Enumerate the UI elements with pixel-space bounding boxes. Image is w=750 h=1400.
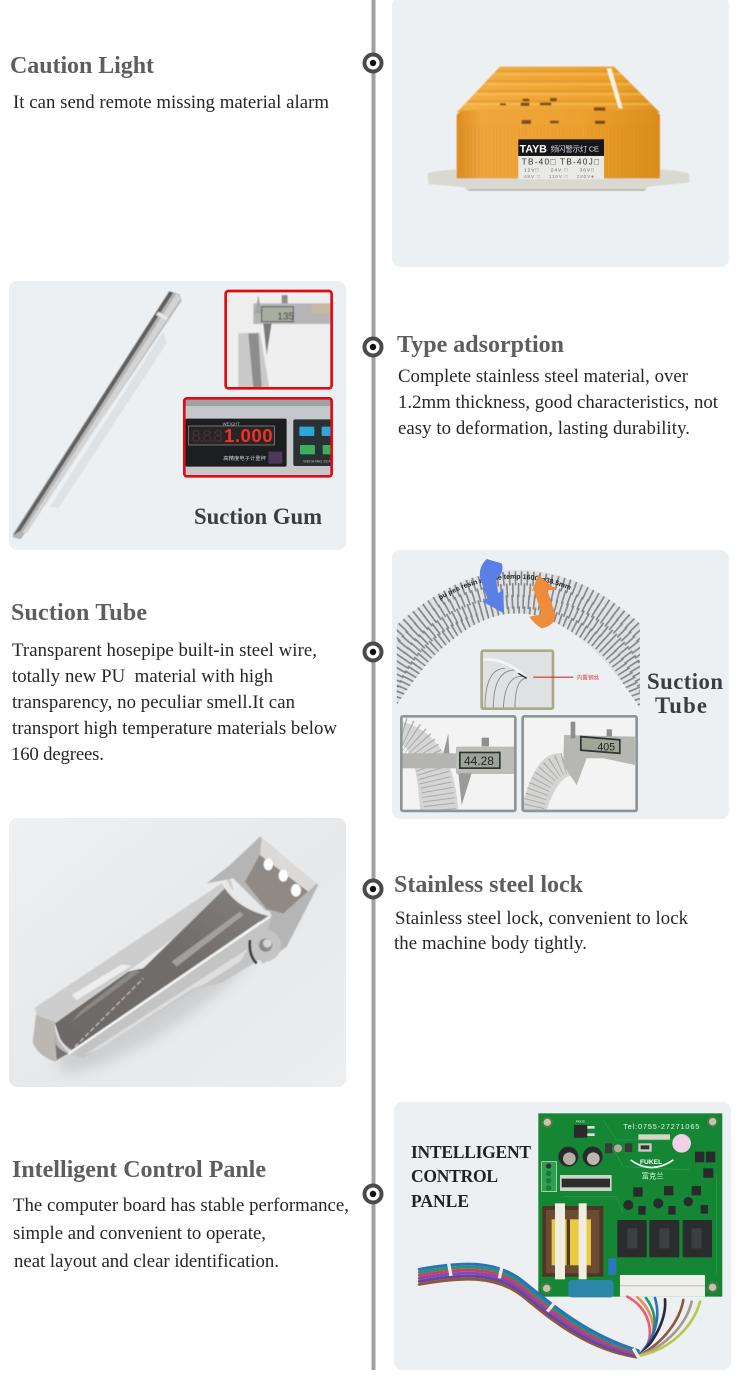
text block: type adsorption (397, 332, 719, 439)
label: model plate: 48V □ 110V □ 220V● (524, 174, 594, 180)
description: type adsorption: easy to deformation, lasting durability. (398, 418, 690, 439)
label: model plate: TAYB (520, 144, 547, 156)
inset: inner diameter caliper (523, 716, 637, 811)
description: type adsorption: 1.2mm thickness, good characteristics, not (398, 392, 719, 413)
description: caution light: It can send remote missing material alarm (13, 92, 329, 113)
board screws (542, 1117, 717, 1293)
timeline marker 3 (364, 644, 382, 660)
panel: suction tube photo (392, 550, 729, 819)
cable ties (448, 1262, 640, 1360)
inset: outer diameter caliper: 44.28 (464, 754, 494, 768)
pink sticker (672, 1134, 691, 1153)
label: model plate: 频闪警示灯 CE (551, 143, 599, 153)
inset: outer diameter caliper (401, 716, 515, 811)
description: suction tube: transport high temperature materials below (12, 718, 337, 739)
heading: caution light: Caution Light (10, 53, 154, 79)
heading: suction tube: Suction Tube (11, 600, 147, 626)
inset: scale reading 1.000: 1.000 (224, 425, 273, 446)
label: suction gum: Suction Gum (194, 504, 322, 529)
terminal block (542, 1162, 557, 1192)
photo: amber caution light (427, 67, 689, 191)
timeline marker 5 (364, 1186, 382, 1202)
photo: stainless steel latch (33, 837, 318, 1091)
board logo (631, 1159, 673, 1181)
description: stainless steel lock (394, 908, 689, 954)
board logo: FUKEL (640, 1159, 662, 1166)
label: intelligent control panle: INTELLIGENT (411, 1142, 531, 1162)
heading: type adsorption: Type adsorption (397, 332, 564, 358)
text block: intelligent control panle (12, 1157, 349, 1272)
panel: stainless steel lock photo (9, 818, 346, 1091)
inset: scale reading 1.000: 高精度电子计重秤 (223, 454, 267, 462)
description: type adsorption (398, 366, 719, 439)
latch bracket (207, 837, 318, 963)
description: intelligent control panle (13, 1195, 349, 1272)
description: stainless steel lock: Stainless steel lock, convenient to lock (395, 908, 689, 929)
photo: circuit board (538, 1113, 722, 1297)
description: intelligent control panle: neat layout and clear identification. (14, 1251, 279, 1272)
callout: red leader line: 内置钢丝 (577, 673, 600, 681)
inset: built-in steel wire (482, 651, 553, 709)
resistor rows (560, 1134, 670, 1191)
description: suction tube: Transparent hosepipe built-in steel wire, (12, 640, 317, 661)
label: suction tube (647, 669, 723, 718)
inset: inner diameter caliper: 405 (597, 742, 615, 754)
blue capacitors (568, 1258, 616, 1297)
description: type adsorption: Complete stainless steel material, over (398, 366, 689, 387)
inset: caliper thickness measurement (226, 291, 332, 388)
inset: scale reading 1.000 (184, 398, 336, 476)
latch lower side (68, 917, 272, 1058)
photo: stainless suction wand (13, 291, 182, 539)
text block: caution light (10, 53, 329, 113)
transformer (542, 1203, 603, 1279)
timeline marker 2 (364, 338, 382, 356)
description: stainless steel lock: the machine body tightly. (394, 933, 587, 954)
timeline axis (372, 0, 376, 1370)
description: suction tube (11, 640, 337, 765)
label: model plate (518, 139, 604, 180)
latch tip (33, 1015, 68, 1062)
label: model plate: 12V□ 24V □ 36V□ (524, 168, 594, 174)
arrow: orange rotation (529, 575, 557, 628)
board logo: 富克兰 (642, 1172, 664, 1181)
heading: intelligent control panle: Intelligent Control Panle (12, 1157, 266, 1183)
latch pivot (249, 930, 281, 962)
text block: stainless steel lock (394, 872, 689, 954)
description: intelligent control panle: The computer board has stable performance, (13, 1195, 349, 1216)
relays (617, 1220, 712, 1257)
small chips (623, 1152, 715, 1215)
wire harness (419, 1264, 700, 1357)
panel: caution light photo (392, 0, 729, 267)
inset: scale reading 1.000: 8.8.8 (191, 426, 223, 446)
label: model plate: TB-40□ TB-40J□ (522, 157, 599, 167)
text block: suction tube (11, 600, 337, 765)
description: intelligent control panle: simple and convenient to operate, (13, 1223, 266, 1244)
label: intelligent control panle (411, 1142, 531, 1211)
photo: ribbed transparent hose (396, 570, 640, 708)
callout: red leader line (533, 673, 600, 681)
photo: ribbed transparent hose: pu pes resin middle temp 160C ø38.5mm (438, 574, 571, 601)
inset: caliper thickness measurement: 135 (277, 311, 294, 322)
photo: circuit board: PMOS (576, 1120, 585, 1124)
inset: scale reading 1.000: WEIGHT (223, 421, 240, 426)
description: suction tube: transparency, no peculiar smell.It can (12, 692, 296, 713)
latch upper lip (35, 878, 235, 1023)
latch channel (55, 887, 270, 1050)
timeline marker 1 (364, 54, 382, 72)
timeline marker 4 (364, 880, 382, 898)
panel: suction gum photo (9, 281, 346, 550)
heading: stainless steel lock: Stainless steel lock (394, 872, 584, 898)
label: suction tube: Suction (647, 669, 723, 694)
label: suction tube: Tube (655, 693, 707, 718)
label: intelligent control panle: CONTROL (411, 1166, 498, 1186)
inset: scale reading 1.000: WEIGHING SCALE (303, 460, 336, 464)
panel: control board photo (394, 1102, 731, 1370)
capacitors (558, 1144, 622, 1167)
label: intelligent control panle: PANLE (411, 1191, 469, 1211)
arrow: blue rotation (480, 559, 504, 613)
description: suction tube: 160 degrees. (11, 744, 104, 765)
board phone number: Tel:0755-27271065 (623, 1122, 699, 1131)
description: suction tube: totally new PU material with high (12, 666, 274, 687)
wire connector (620, 1275, 705, 1297)
